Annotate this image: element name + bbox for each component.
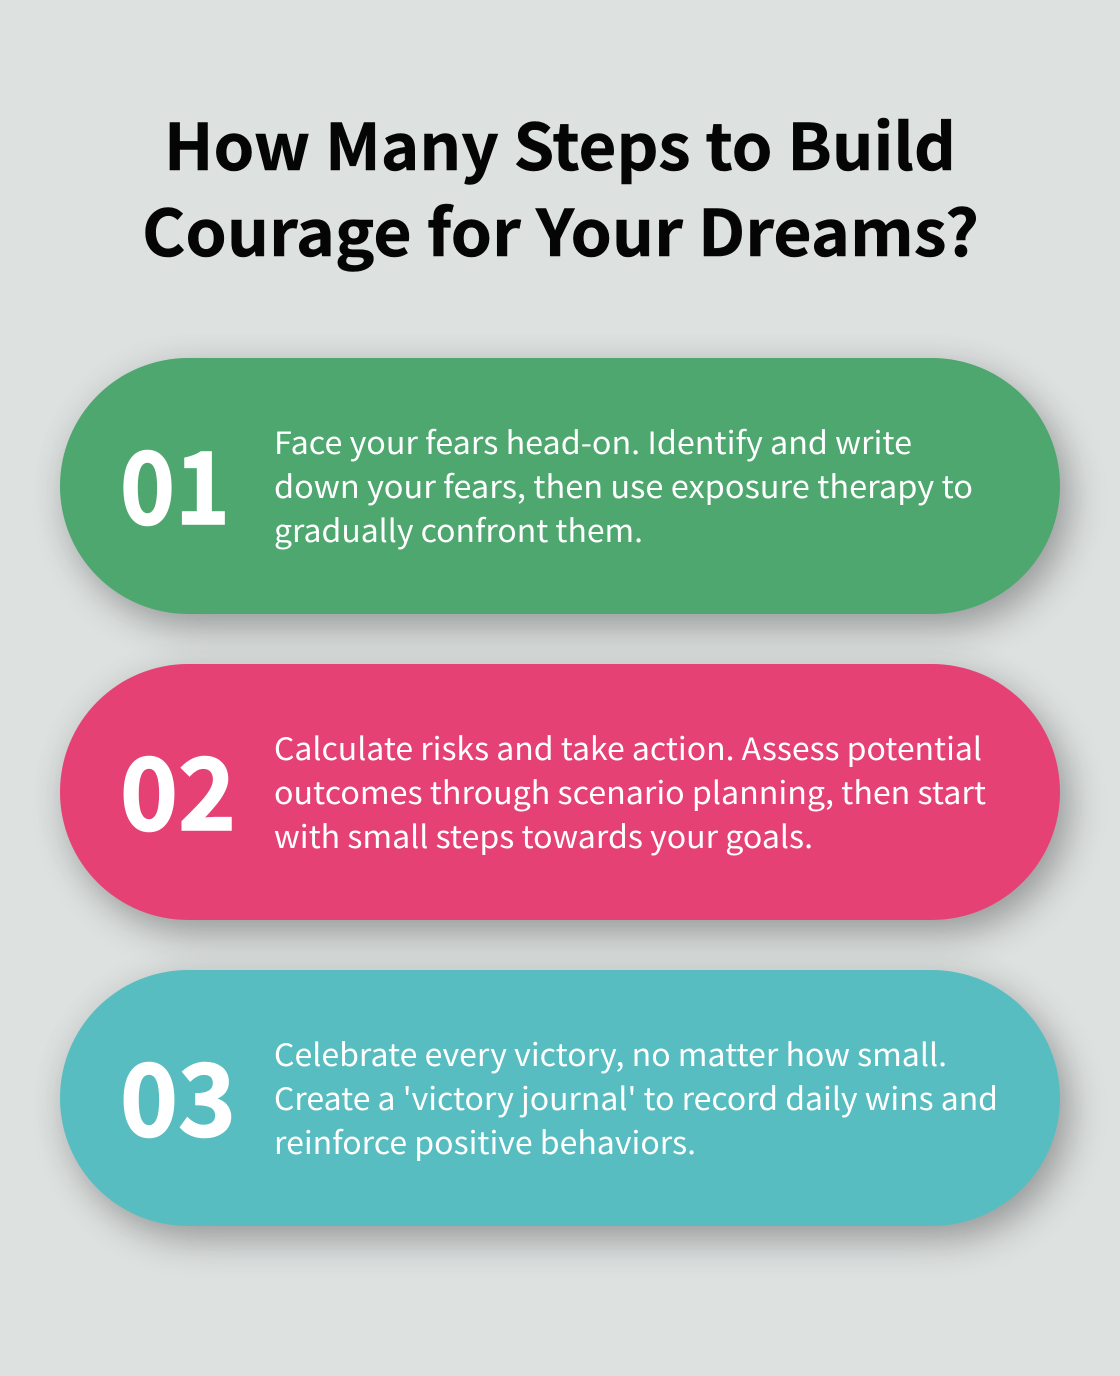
- text: step 02 description: [274, 724, 986, 857]
- title: How Many Steps to Build: [164, 97, 956, 189]
- text: step 01 description: [274, 418, 973, 551]
- text: step 02 description: outcomes through scenario planning, then start: [274, 768, 986, 813]
- text: step 03 description: reinforce positive behaviors.: [274, 1118, 696, 1163]
- text: step 02 description: Calculate risks and take action. Assess potential: [274, 724, 982, 769]
- title: [142, 97, 979, 275]
- panel: step 02: [60, 664, 1060, 920]
- number 01: 01: [120, 408, 230, 553]
- text: step 01 description: down your fears, then use exposure therapy to: [274, 462, 973, 507]
- panel: step 01: [60, 358, 1060, 614]
- title: Courage for Your Dreams?: [142, 183, 979, 275]
- text: step 02 description: with small steps towards your goals.: [274, 812, 813, 857]
- text: step 01 description: Face your fears head-on. Identify and write: [274, 418, 912, 463]
- text: step 03 description: Create a 'victory journal' to record daily wins and: [274, 1074, 998, 1119]
- text: step 03 description: [274, 1030, 998, 1163]
- panel: step 03: [60, 970, 1060, 1226]
- number 03: 03: [120, 1020, 236, 1165]
- text: step 03 description: Celebrate every victory, no matter how small.: [274, 1030, 947, 1075]
- number 02: 02: [120, 714, 236, 859]
- text: step 01 description: gradually confront them.: [274, 506, 643, 551]
